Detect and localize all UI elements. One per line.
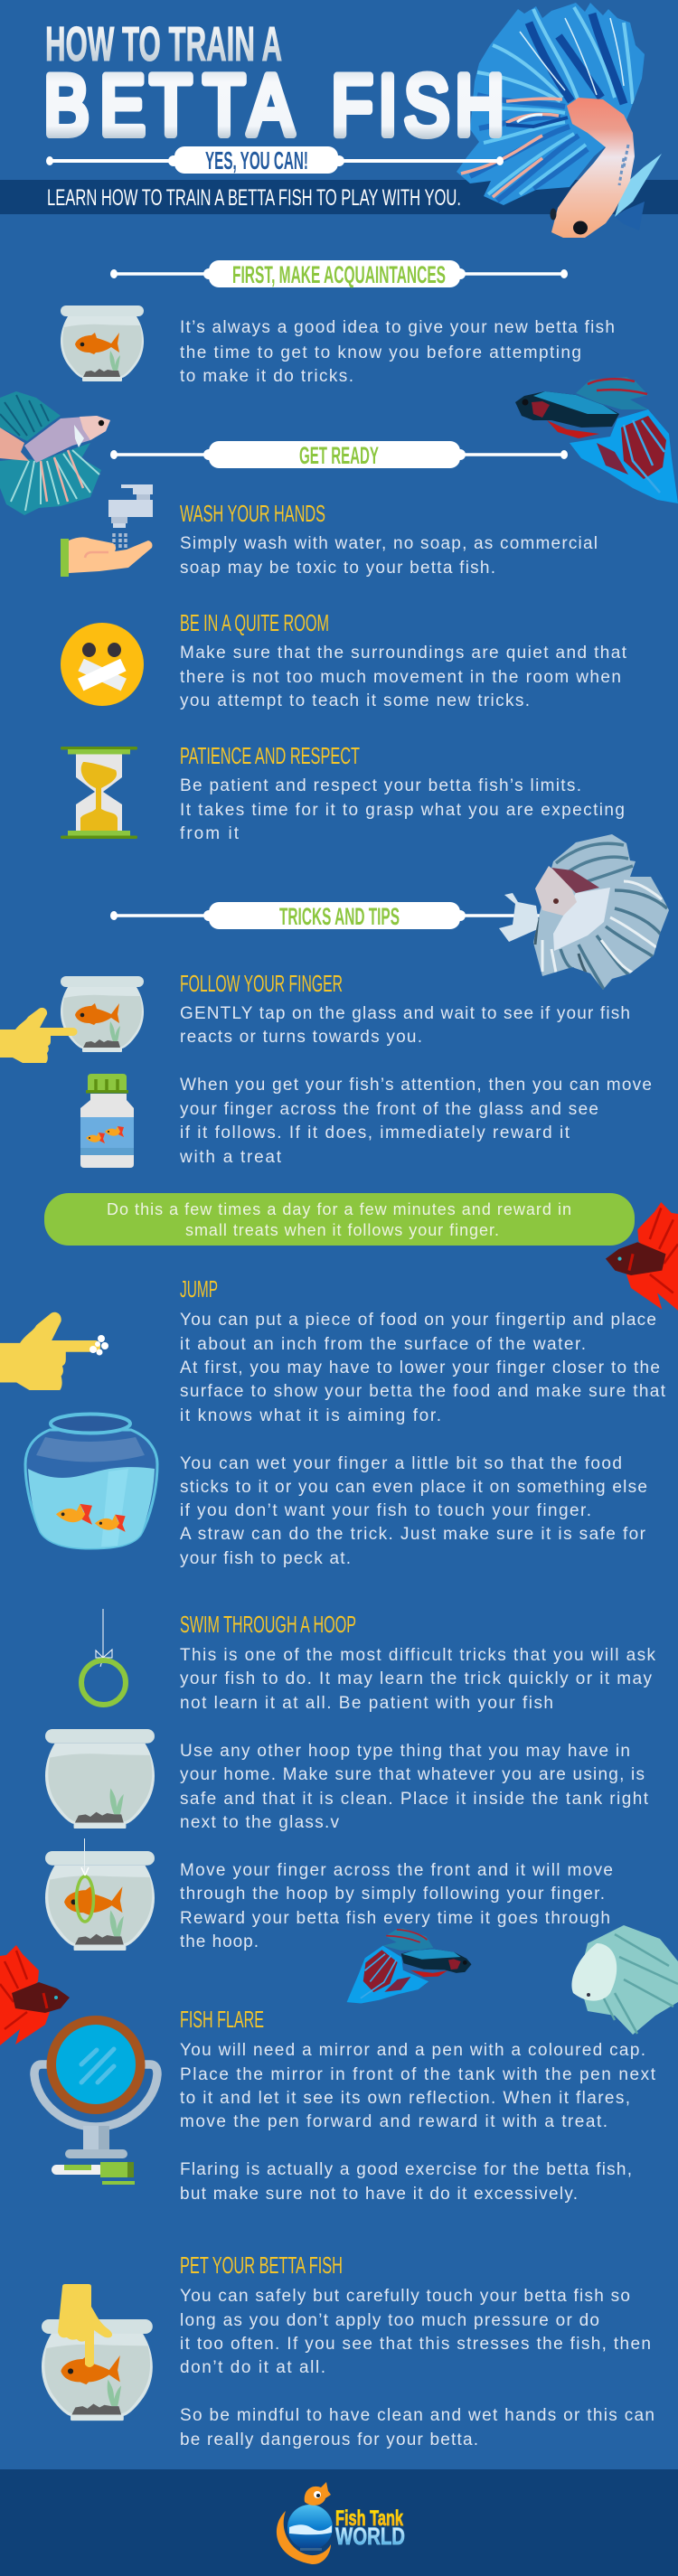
text block: flare two bbox=[180, 2160, 632, 2204]
icon: hourglass bbox=[61, 747, 137, 839]
text block: pet two: So be mindful to have clean and wet hands or this can bbox=[180, 2406, 654, 2425]
fish: silver and grey bbox=[499, 832, 673, 994]
fish: red, left bbox=[0, 1945, 70, 2045]
text block: jump one: it knows what it is aiming for. bbox=[180, 1406, 441, 1425]
text block: reward with a treat bbox=[179, 1076, 652, 1167]
callout: green pill: small treats when it follows your finger. bbox=[185, 1221, 499, 1239]
text block: reward with a treat: with a treat bbox=[179, 1148, 282, 1167]
text block: flare one: You will need a mirror and a pen with a coloured cap. bbox=[180, 2041, 645, 2060]
text block: reward with a treat: if it follows. If it does, immediately reward it bbox=[180, 1123, 570, 1142]
heading: fish flare: FISH FLARE bbox=[180, 2006, 264, 2033]
fish: small dark blue bbox=[347, 1919, 476, 2031]
text block: hoop three: through the hoop by simply following your finger. bbox=[180, 1885, 605, 1904]
fish: red, right bbox=[606, 1202, 678, 1311]
text block: patience bbox=[180, 776, 625, 843]
icon: glass jar with goldfish bbox=[25, 1414, 157, 1548]
section heading: tricks and tips: TRICKS AND TIPS bbox=[279, 903, 400, 930]
text block: patience: Be patient and respect your betta fish’s limits. bbox=[180, 776, 581, 795]
text block: wash your hands bbox=[180, 534, 598, 578]
text block: jump two: your fish to peck at. bbox=[180, 1549, 351, 1568]
text block: jump one: You can put a piece of food on your fingertip and place bbox=[180, 1311, 656, 1330]
heading: pet your betta fish: PET YOUR BETTA FISH bbox=[180, 2252, 343, 2279]
text block: reward with a treat: your finger across the front of the glass and see bbox=[180, 1100, 598, 1119]
text block: flare two: Flaring is actually a good exercise for the betta fish, bbox=[180, 2160, 632, 2179]
logo: fish tank world: WORLD bbox=[335, 2523, 405, 2550]
text block: flare one: move the pen forward and reward it with a treat. bbox=[180, 2112, 607, 2131]
icon: hanging hoop bbox=[81, 1609, 126, 1705]
heading: be in a quite room: BE IN A QUITE ROOM bbox=[180, 609, 329, 636]
text block: jump one: it about an inch from the surface of the water. bbox=[180, 1335, 586, 1354]
text block: flare two: but make sure not to have it do it excessively. bbox=[180, 2185, 578, 2204]
divider: yes you can bbox=[46, 146, 504, 174]
text block: acquaintances: the time to get to know you before attempting bbox=[180, 343, 581, 362]
text block: pet one: it too often. If you see that this stresses the fish, then bbox=[180, 2335, 651, 2354]
text block: flare one: to it and let it see its own reflection. When it flares, bbox=[180, 2089, 630, 2108]
text block: tap the glass: reacts or turns towards you. bbox=[180, 1028, 422, 1047]
text block: hoop three: the hoop. bbox=[180, 1932, 259, 1951]
icon: pen bbox=[52, 2162, 135, 2185]
text block: acquaintances bbox=[180, 318, 615, 386]
text block: hoop one bbox=[180, 1646, 655, 1713]
fish: lilac and teal, left bbox=[0, 391, 110, 515]
icon: fish swimming through hoop in bowl bbox=[45, 1838, 155, 1951]
text block: hoop three: Move your finger across the front and it will move bbox=[180, 1861, 613, 1880]
title bbox=[43, 17, 504, 153]
betta fish: blue and peach bbox=[452, 0, 662, 238]
text block: hoop three bbox=[180, 1861, 613, 1951]
text block: hoop two: your home. Make sure that whatever you are using, is bbox=[180, 1765, 645, 1784]
text block: patience: It takes time for it to grasp what you are expecting bbox=[180, 801, 625, 820]
text block: hoop three: Reward your betta fish every time it goes through bbox=[180, 1909, 610, 1928]
heading: patience and respect: PATIENCE AND RESPECT bbox=[180, 742, 360, 769]
text block: hoop two bbox=[180, 1742, 649, 1832]
icon: mirror bbox=[34, 2016, 157, 2158]
text block: hoop one: not learn it at all. Be patient with your fish bbox=[180, 1694, 553, 1713]
subtitle band bbox=[0, 180, 678, 214]
heading: follow your finger: FOLLOW YOUR FINGER bbox=[180, 970, 343, 997]
text block: hoop one: your fish to do. It may learn the trick quickly or it may bbox=[180, 1669, 653, 1688]
title line one: HOW TO TRAIN A bbox=[45, 17, 282, 71]
icon: hand petting fish in bowl bbox=[42, 2284, 153, 2421]
text block: wash your hands: soap may be toxic to your betta fish. bbox=[180, 559, 495, 578]
text block: quiet room bbox=[180, 644, 627, 710]
icon: tap and hand bbox=[61, 484, 153, 577]
text block: tap the glass bbox=[180, 1004, 630, 1047]
text block: flare one: Place the mirror in front of the tank with the pen next bbox=[180, 2065, 656, 2084]
icon: finger with food bbox=[0, 1312, 108, 1390]
text block: jump two bbox=[180, 1454, 647, 1568]
text block: tap the glass: GENTLY tap on the glass and wait to see if your fish bbox=[180, 1004, 630, 1023]
divider: yes you can: YES, YOU CAN! bbox=[205, 146, 308, 174]
text block: wash your hands: Simply wash with water, no soap, as commercial bbox=[180, 534, 598, 553]
icon: empty bowl bbox=[45, 1729, 155, 1829]
text block: quiet room: there is not too much movement in the room when bbox=[180, 668, 621, 687]
text block: jump two: sticks to it or you can even place it on something else bbox=[180, 1478, 647, 1497]
logo: fish tank world bbox=[277, 2482, 405, 2564]
text block: quiet room: Make sure that the surroundings are quiet and that bbox=[180, 644, 627, 663]
footer band bbox=[0, 2469, 678, 2576]
text block: jump one bbox=[180, 1311, 666, 1425]
text block: jump two: You can wet your finger a little bit so that the food bbox=[180, 1454, 622, 1473]
text block: hoop two: Use any other hoop type thing that you may have in bbox=[180, 1742, 630, 1761]
text block: flare one bbox=[180, 2041, 656, 2131]
section heading: tricks and tips bbox=[110, 902, 542, 930]
icon: treat bottle bbox=[80, 1074, 134, 1168]
icon: fish bowl bbox=[61, 306, 144, 381]
subtitle: LEARN HOW TO TRAIN A BETTA FISH TO PLAY WITH YOU. bbox=[47, 185, 461, 211]
text block: quiet room: you attempt to teach it some new tricks. bbox=[180, 691, 530, 710]
text block: hoop two: next to the glass.v bbox=[180, 1813, 340, 1832]
title line two: BETTA FISH bbox=[43, 59, 504, 153]
heading: swim through a hoop: SWIM THROUGH A HOOP bbox=[180, 1611, 356, 1638]
logo: fish tank world: Fish Tank bbox=[335, 2506, 403, 2531]
text block: pet one: don’t do it at all. bbox=[180, 2358, 325, 2377]
section heading: get ready bbox=[110, 441, 568, 469]
text block: jump two: if you don’t want your fish to touch your finger. bbox=[180, 1501, 591, 1520]
text block: pet one bbox=[180, 2287, 651, 2377]
fish: dark blue and red, right bbox=[515, 377, 678, 503]
text block: patience: from it bbox=[180, 824, 240, 843]
text block: pet one: long as you don’t apply too much pressure or do bbox=[180, 2311, 599, 2330]
text block: pet two bbox=[180, 2406, 654, 2449]
text block: pet one: You can safely but carefully touch your betta fish so bbox=[180, 2287, 630, 2306]
heading: wash your hands: WASH YOUR HANDS bbox=[180, 500, 325, 527]
text block: acquaintances: It’s always a good idea to give your new betta fish bbox=[180, 318, 615, 337]
icon: silent face bbox=[61, 623, 144, 706]
fish: pale teal bbox=[571, 1925, 678, 2035]
text block: acquaintances: to make it do tricks. bbox=[180, 367, 353, 386]
icon: finger tapping fish bowl bbox=[0, 976, 144, 1063]
section heading: first, make acquaintances bbox=[110, 260, 568, 288]
callout: green pill bbox=[44, 1193, 635, 1246]
section heading: get ready: GET READY bbox=[299, 442, 379, 469]
section heading: first, make acquaintances: FIRST, MAKE ACQUAINTANCES bbox=[232, 261, 446, 288]
heading: jump: JUMP bbox=[180, 1275, 218, 1302]
text block: jump two: A straw can do the trick. Just make sure it is safe for bbox=[180, 1525, 646, 1544]
text block: jump one: surface to show your betta the food and make sure that bbox=[180, 1382, 666, 1401]
text block: hoop one: This is one of the most difficult tricks that you will ask bbox=[180, 1646, 655, 1665]
text block: pet two: be really dangerous for your betta. bbox=[180, 2430, 478, 2449]
text block: jump one: At first, you may have to lower your finger closer to the bbox=[180, 1359, 660, 1377]
callout: green pill: Do this a few times a day for a few minutes and reward in bbox=[107, 1200, 571, 1218]
text block: reward with a treat: When you get your fish’s attention, then you can move bbox=[180, 1076, 652, 1095]
text block: hoop two: safe and that it is clean. Place it inside the tank right bbox=[180, 1790, 649, 1809]
